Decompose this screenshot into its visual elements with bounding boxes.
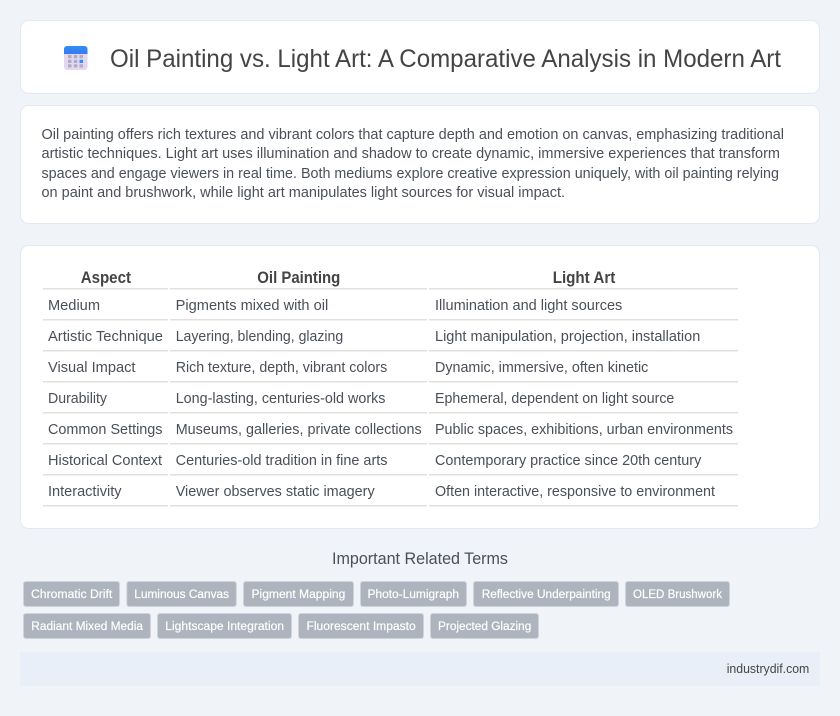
- tag: Projected Glazing: Projected Glazing: [438, 619, 531, 633]
- tag: Lightscape Integration: Lightscape Integration: [165, 619, 284, 633]
- row: Interactivity: Viewer observes static imagery: [176, 484, 375, 500]
- row: Durability: Durability: [48, 391, 108, 407]
- tag: Radiant Mixed Media: [24, 614, 150, 638]
- tag: Fluorescent Impasto: Fluorescent Impasto: [306, 619, 416, 633]
- row: Interactivity: Interactivity: [48, 484, 122, 500]
- heading: related terms: Important Related Terms: [332, 550, 508, 568]
- related term tags: [24, 582, 730, 638]
- row: Visual Impact: [48, 360, 648, 376]
- tag: Fluorescent Impasto: [298, 614, 424, 638]
- row: Visual Impact: Rich texture, depth, vibrant colors: [176, 360, 387, 376]
- row: Durability: Ephemeral, dependent on light source: [435, 391, 674, 407]
- row: Historical Context: Centuries-old tradition in fine arts: [176, 453, 388, 469]
- row: Historical Context: Historical Context: [48, 453, 162, 469]
- paragraph: artistic techniques. Light art uses illumination and shadow to create dynamic, immersive experiences that transform: [42, 146, 780, 162]
- paragraph: on paint and brushwork, while light art manipulates light sources for visual impact.: [42, 185, 565, 201]
- footer source text: industrydif.com: [727, 661, 809, 676]
- tag: OLED Brushwork: OLED Brushwork: [633, 587, 723, 601]
- paragraph: Oil painting offers rich textures and vibrant colors that capture depth and emotion on canvas, emphasizing traditional: [42, 127, 784, 143]
- panel: comparison table: [20, 246, 820, 528]
- tag: Lightscape Integration: [158, 614, 292, 638]
- row: Interactivity: [48, 484, 715, 500]
- tag: Reflective Underpainting: Reflective Underpainting: [482, 587, 611, 601]
- row: Common Settings: Museums, galleries, private collections: [176, 422, 422, 438]
- tag: Chromatic Drift: Chromatic Drift: [31, 587, 113, 601]
- row: Artistic Technique: [48, 329, 700, 345]
- row: Durability: [48, 391, 674, 407]
- row: Historical Context: Contemporary practice since 20th century: [435, 453, 702, 469]
- row: Visual Impact: Dynamic, immersive, often kinetic: [435, 360, 648, 376]
- row: Medium: Medium: [48, 298, 100, 314]
- tag: Pigment Mapping: [244, 582, 354, 606]
- footer bar: [20, 652, 820, 686]
- tag: Photo-Lumigraph: [360, 582, 466, 606]
- table header row: [81, 269, 616, 287]
- row: Medium: [48, 298, 622, 314]
- tag: Photo-Lumigraph: Photo-Lumigraph: [368, 587, 459, 601]
- row: Visual Impact: Visual Impact: [48, 360, 136, 376]
- tag: Pigment Mapping: Pigment Mapping: [252, 587, 345, 601]
- tag: Reflective Underpainting: [474, 582, 618, 606]
- row: Durability: Long-lasting, centuries-old works: [176, 391, 386, 407]
- row: Common Settings: Common Settings: [48, 422, 162, 438]
- row: Common Settings: Public spaces, exhibitions, urban environments: [435, 422, 733, 438]
- tag: Luminous Canvas: Luminous Canvas: [134, 587, 229, 601]
- table header row: Aspect: [81, 269, 131, 287]
- icon: calendar grid: [64, 46, 88, 70]
- row: Medium: Pigments mixed with oil: [176, 298, 328, 314]
- tag: Projected Glazing: [430, 614, 538, 638]
- row: Artistic Technique: Layering, blending, glazing: [176, 329, 343, 345]
- tag: Luminous Canvas: [127, 582, 236, 606]
- paragraph: spaces and engage viewers in real time. Both mediums explore creative expression uniquely, with oil painting relying: [42, 166, 779, 182]
- row: Artistic Technique: Light manipulation, projection, installation: [435, 329, 700, 345]
- paragraph: [42, 127, 784, 201]
- table header row: Light Art: [553, 269, 616, 287]
- row: Common Settings: [48, 422, 733, 438]
- panel: introduction text: [20, 106, 820, 224]
- row: Artistic Technique: Artistic Technique: [48, 329, 163, 345]
- tag: Chromatic Drift: [24, 582, 120, 606]
- tag: Radiant Mixed Media: Radiant Mixed Media: [31, 619, 143, 633]
- row: Medium: Illumination and light sources: [435, 298, 622, 314]
- row: Historical Context: [48, 453, 702, 469]
- title: Oil Painting vs. Light Art: A Comparative Analysis in Modern Art: [110, 45, 781, 73]
- table header row: Oil Painting: [257, 269, 340, 287]
- tag: OLED Brushwork: [626, 582, 730, 606]
- row: Interactivity: Often interactive, responsive to environment: [435, 484, 715, 500]
- panel: header: [20, 20, 820, 94]
